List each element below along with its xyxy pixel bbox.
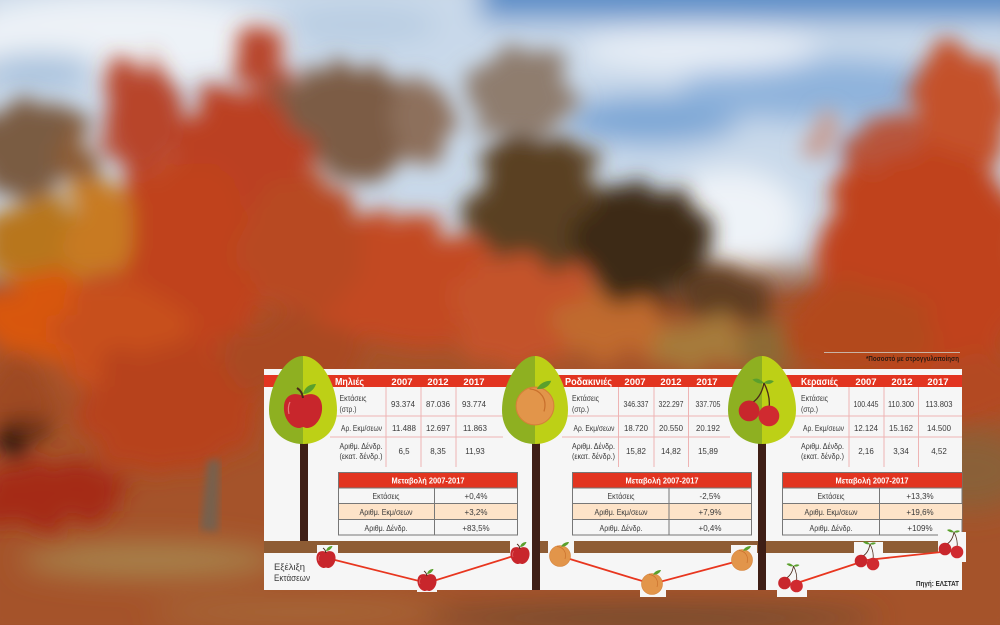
apple change table: +3,2% (465, 508, 487, 517)
peach table row: trees: Αριθμ. Δένδρ. (572, 442, 615, 451)
line chart: cherry areas (777, 529, 966, 597)
apple change table: Μεταβολή 2007-2017 (392, 476, 465, 486)
peach table row: areas: Εκτάσεις (572, 394, 599, 403)
cherry change table: Αριθμ. Εκμ/σεων (804, 508, 858, 517)
peach table row: trees: 15,89 (698, 447, 719, 456)
apple change table: Αριθμ. Εκμ/σεων (360, 508, 412, 517)
panel: lower chart strip background (264, 553, 962, 590)
peach title and years: 2017 (696, 377, 718, 388)
cherry change table (782, 472, 962, 535)
peach table row: holdings: 20.192 (696, 424, 721, 433)
peach table row: areas: 346.337 (624, 400, 649, 409)
apple table row: areas: Εκτάσεις (340, 394, 367, 403)
cherry table row: trees: 3,34 (893, 447, 909, 456)
apple change table: +0,4% (465, 492, 487, 501)
icon: cherry tree (728, 356, 796, 590)
peach table row: trees (572, 442, 719, 461)
apple change table (338, 472, 518, 535)
peach table grid (562, 387, 730, 467)
peach table row: trees: 14,82 (661, 447, 682, 456)
footnote: rounded percentages (824, 352, 960, 363)
cherry table row: trees: 4,52 (931, 447, 947, 456)
label: area evolution (274, 562, 310, 584)
apple title and years: Μηλιές (335, 376, 364, 388)
peach change table: Αριθμ. Εκμ/σεων (594, 508, 648, 517)
cherry table row: trees: (εκατ. δένδρ.) (801, 452, 844, 461)
peach change table: Αριθμ. Δένδρ. (600, 524, 642, 533)
cherry table row: holdings (803, 424, 952, 433)
cherry title and years: 2007 (855, 377, 877, 388)
cherry change table: +19,6% (906, 508, 934, 517)
red header band (264, 375, 962, 387)
cherry change table: Αριθμ. Δένδρ. (810, 524, 852, 533)
cherry change table: +13,3% (906, 492, 934, 501)
cherry table row: areas: (στρ.) (801, 405, 818, 414)
peach table row: areas (572, 394, 721, 414)
peach table row: holdings (574, 424, 721, 433)
apple change table: Εκτάσεις (372, 492, 400, 501)
apple table row: trees (340, 442, 485, 461)
cherry table row: trees: Αριθμ. Δένδρ. (801, 442, 844, 451)
apple table row: holdings: 11.863 (463, 424, 488, 433)
apple table row: trees: 6,5 (398, 447, 410, 456)
panel: apples (330, 376, 518, 535)
apple table grid (330, 387, 503, 467)
apple table row: holdings (341, 424, 488, 433)
peach title and years: Ροδακινιές (565, 376, 612, 388)
cherry change table: Μεταβολή 2007-2017 (836, 476, 909, 486)
peach title and years: 2007 (624, 377, 646, 388)
source note: Πηγή: ΕΛΣΤΑΤ (916, 579, 959, 588)
apple table row: areas: 87.036 (426, 400, 451, 409)
peach table row: holdings: Αρ. Εκμ/σεων (574, 424, 614, 433)
apple table row: trees: 11,93 (465, 447, 485, 456)
apple change table: +83,5% (462, 524, 490, 533)
peach table row: areas: 322.297 (658, 400, 684, 409)
peach change table: -2,5% (700, 492, 720, 501)
cherry change table: +109% (907, 524, 933, 533)
gap strip tone between panels (264, 541, 962, 553)
cherry table row: holdings: Αρ. Εκμ/σεων (803, 424, 844, 433)
apple table row: areas (340, 394, 487, 414)
panel: main white table background (264, 369, 962, 541)
apple change table: Αριθμ. Δένδρ. (364, 524, 408, 533)
panel: cherries (782, 376, 962, 535)
peach title and years (565, 376, 718, 388)
apple table row: trees: Αριθμ. Δένδρ. (340, 442, 382, 451)
label: area evolution: Εκτάσεων (274, 573, 310, 584)
apple table row: holdings: Αρ. Εκμ/σεων (341, 424, 382, 433)
cherry table row: holdings: 12.124 (854, 424, 879, 433)
icon: apple tree (269, 356, 337, 541)
apple title and years (335, 376, 485, 388)
footnote: rounded percentages: *Ποσοστό με στρογγυλοποίηση (866, 355, 959, 363)
apple table row: areas: (στρ.) (340, 405, 357, 414)
peach table row: trees: (εκατ. δένδρ.) (572, 452, 615, 461)
peach table row: areas: (στρ.) (572, 405, 589, 414)
cherry title and years: 2012 (891, 377, 913, 388)
peach change table: Μεταβολή 2007-2017 (626, 476, 699, 486)
apple table row: trees: 8,35 (430, 447, 446, 456)
apple title and years: 2007 (391, 377, 413, 388)
apple title and years: 2012 (427, 377, 449, 388)
cherry change table: Εκτάσεις (818, 492, 845, 501)
line chart: peach areas (548, 541, 757, 597)
cherry title and years: 2017 (927, 377, 949, 388)
cherry table row: areas: 110.300 (888, 400, 915, 409)
apple title and years: 2017 (463, 377, 485, 388)
cherry title and years (801, 376, 949, 388)
line chart: apple areas (316, 541, 532, 592)
apple table row: areas: 93.374 (391, 400, 416, 409)
panel: peaches (562, 376, 752, 535)
apple table row: trees: (εκατ. δένδρ.) (340, 452, 383, 461)
peach change table: Εκτάσεις (608, 492, 635, 501)
peach table row: areas: 337.705 (696, 400, 721, 409)
apple table row: holdings: 12.697 (426, 424, 451, 433)
icon: peach tree (502, 356, 568, 590)
label: area evolution: Εξέλιξη (274, 562, 305, 573)
cherry table row: trees: 2,16 (858, 447, 874, 456)
cherry table row: holdings: 15.162 (889, 424, 914, 433)
apple table row: holdings: 11.488 (392, 424, 417, 433)
cherry table row: holdings: 14.500 (927, 424, 952, 433)
peach title and years: 2012 (660, 377, 682, 388)
cherry table row: trees (801, 442, 947, 461)
apple table row: areas: 93.774 (462, 400, 487, 409)
cherry table row: areas: 100.445 (854, 400, 879, 409)
peach table row: holdings: 20.550 (659, 424, 684, 433)
cherry table row: areas (801, 394, 953, 414)
peach change table: +0,4% (699, 524, 721, 533)
cherry table row: areas: 113.803 (926, 400, 953, 409)
cherry title and years: Κερασιές (801, 376, 838, 388)
cherry table row: areas: Εκτάσεις (801, 394, 828, 403)
peach table row: trees: 15,82 (626, 447, 647, 456)
peach change table: +7,9% (699, 508, 721, 517)
peach change table (572, 472, 752, 535)
peach table row: holdings: 18.720 (624, 424, 649, 433)
cherry table grid (790, 387, 962, 467)
